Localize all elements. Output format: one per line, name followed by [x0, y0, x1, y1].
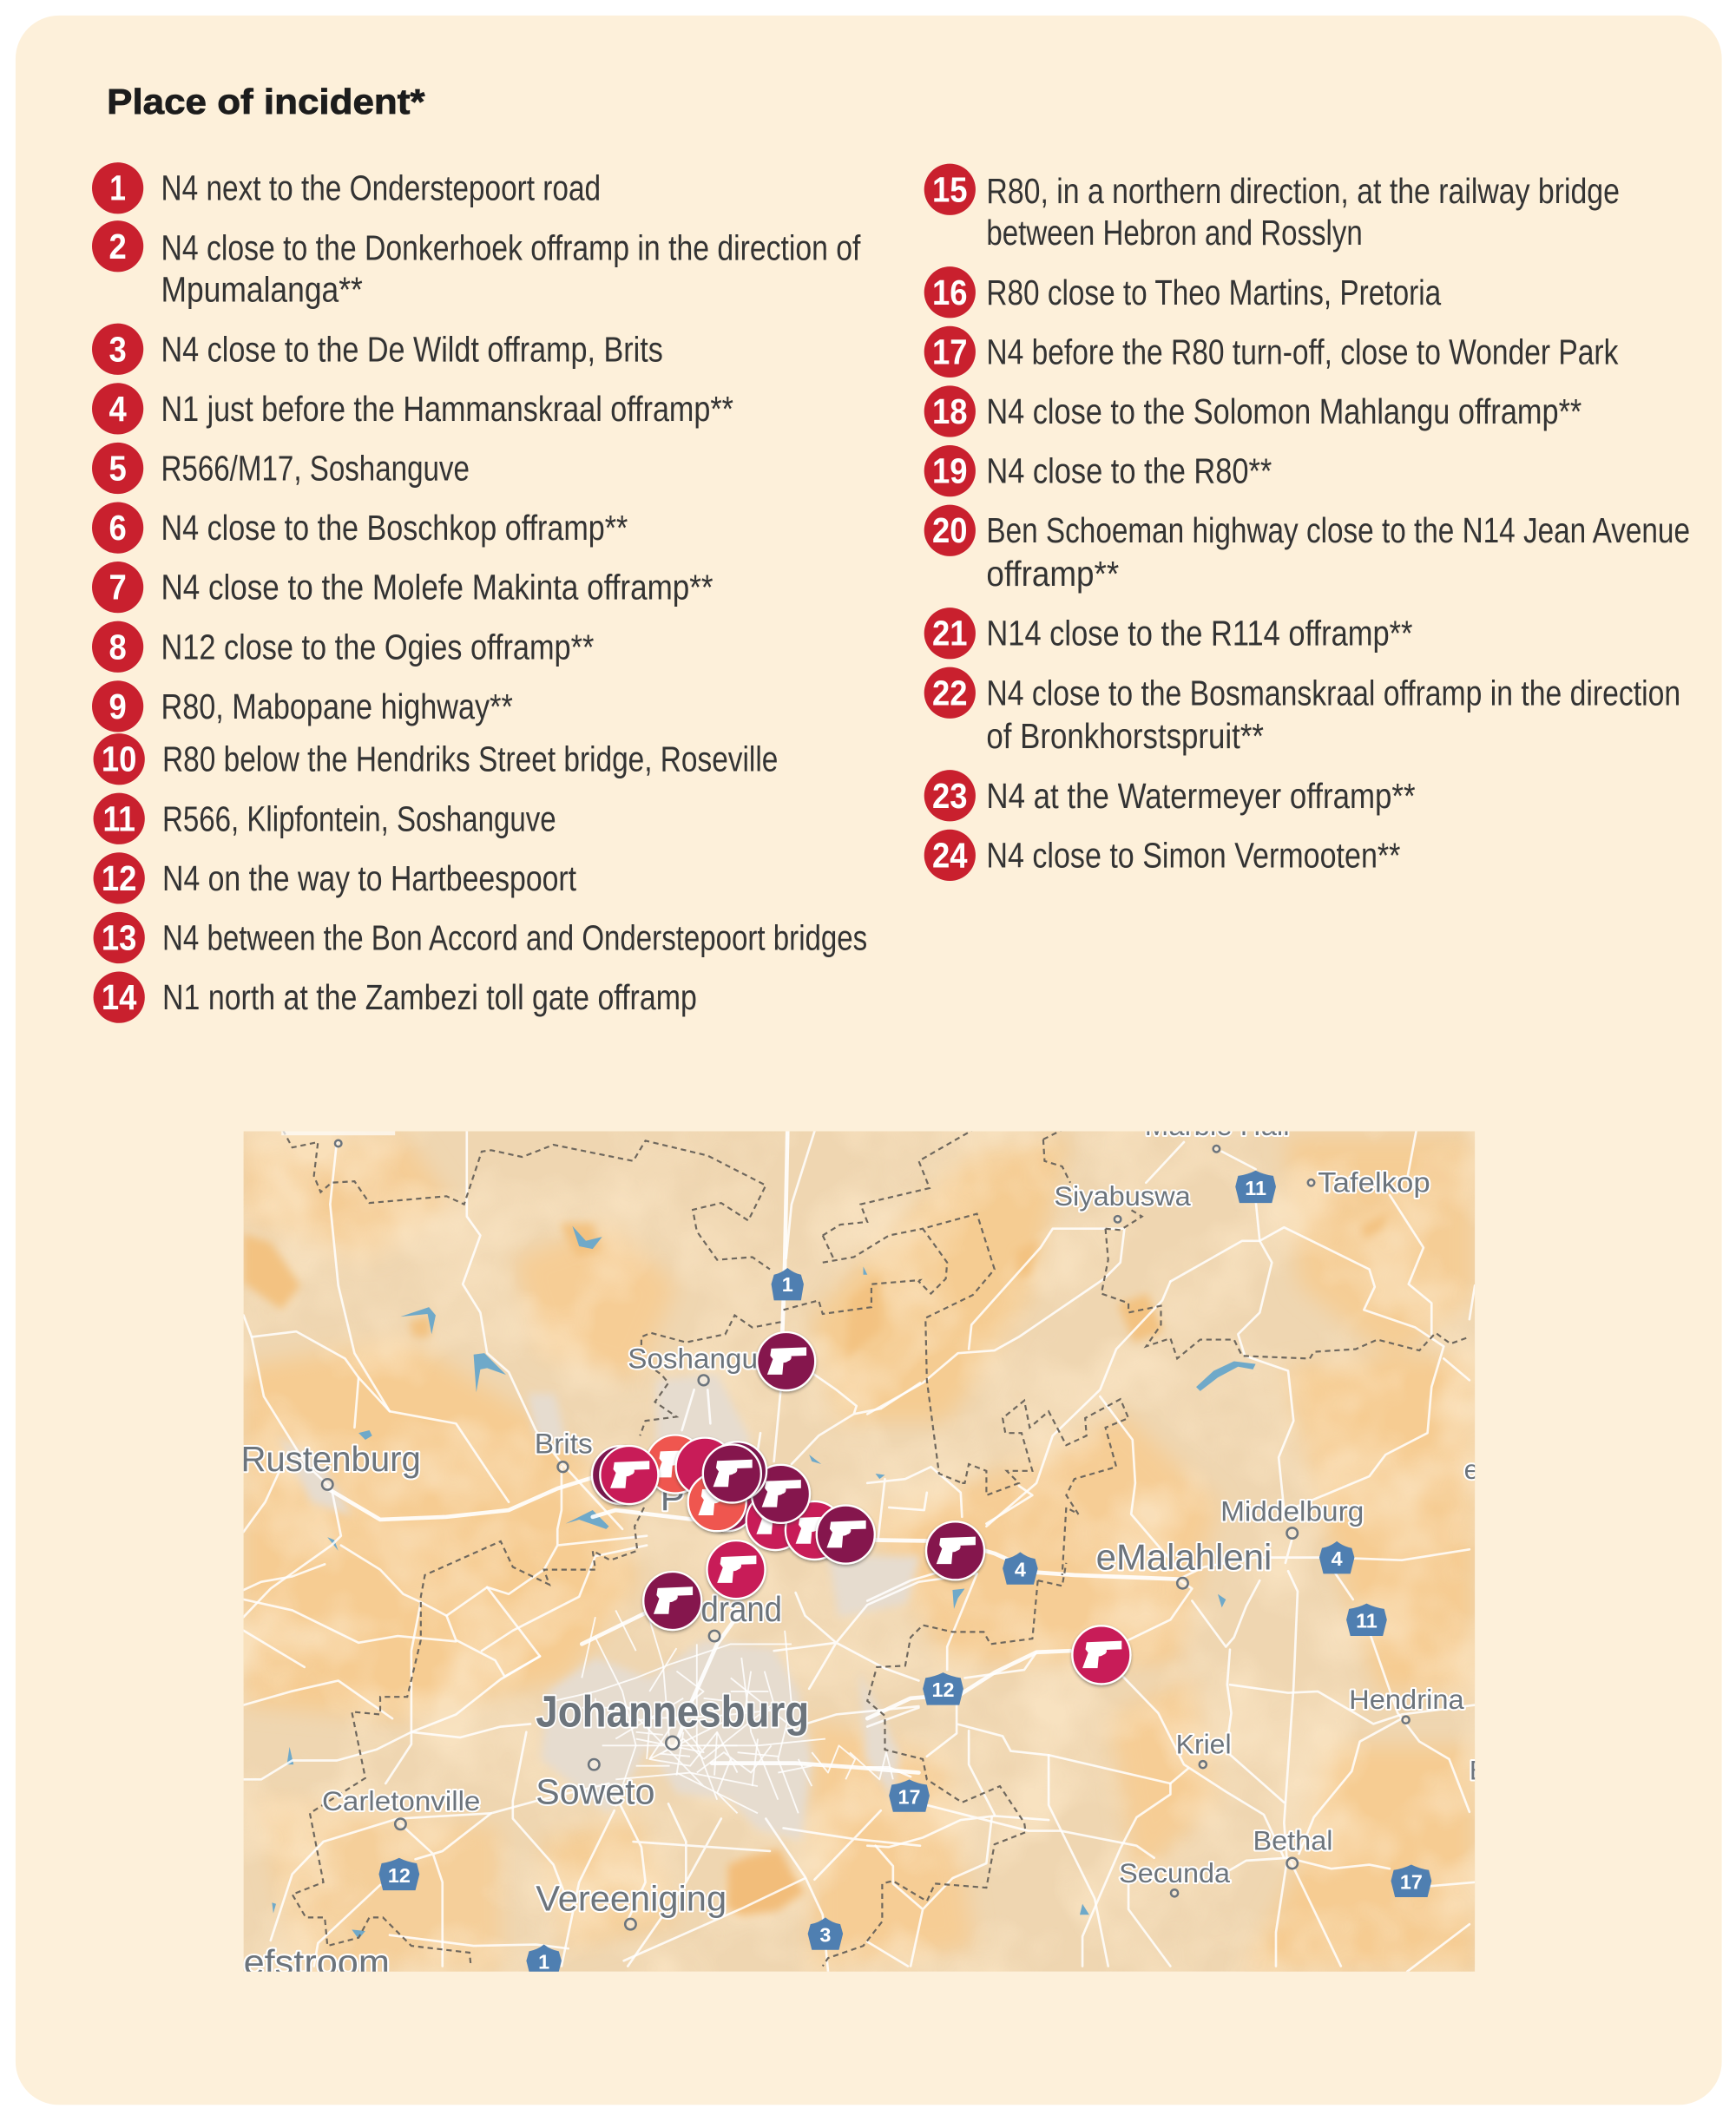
shield N3: [808, 1917, 843, 1950]
label: Soshanguve: Soshangu: [628, 1342, 758, 1374]
item 17: 17: [932, 332, 968, 371]
item 6: N4 close to the Boschkop offramp**: [161, 508, 628, 548]
label: Klerksdorp clipped: efstroom: [244, 1942, 390, 1982]
label: Siyabuswa: Siyabuswa: [1054, 1181, 1191, 1212]
shield N1 north: 1: [782, 1273, 793, 1296]
marker: crimson east 1: [746, 1492, 805, 1550]
item 21: 21: [932, 614, 968, 654]
item 15: R80, in a northern direction, at the railway bridge: [986, 171, 1620, 211]
item 24: 24: [932, 835, 968, 875]
urban grey areas: [278, 1374, 920, 1840]
item 12: 12: [102, 858, 136, 898]
item 23: [924, 770, 1416, 821]
item 10: R80 below the Hendriks Street bridge, Roseville: [162, 739, 778, 779]
item 7: N4 close to the Molefe Makinta offramp**: [161, 568, 713, 608]
item 4: 4: [108, 389, 127, 429]
item 7: [92, 562, 713, 613]
item 24: [924, 830, 1401, 881]
route shields: [378, 1171, 1431, 1977]
label: eMalahleni: eMalahleni: [1096, 1537, 1272, 1578]
item 2: N4 close to the Donkerhoek offramp in the direction of: [161, 227, 861, 267]
marker: crimson behind: [676, 1438, 734, 1496]
item 10: 10: [102, 739, 136, 779]
item 19: 19: [932, 451, 968, 491]
item 15: between Hebron and Rosslyn: [986, 213, 1363, 253]
item 11: [94, 793, 556, 844]
item 22: 22: [932, 673, 968, 713]
label: Marble Hall: Marble Hall: [1145, 1109, 1290, 1142]
label: Soweto: Soweto: [536, 1771, 654, 1811]
shield N4 east: [1319, 1541, 1354, 1573]
item 7: 7: [108, 568, 127, 608]
item 16: [924, 266, 1442, 318]
map terrain patches: [244, 1131, 1475, 1972]
marker: east of Pretoria: [926, 1521, 984, 1580]
label: Brits: Brits: [535, 1428, 593, 1460]
label: Tafelkop: Tafelkop: [1318, 1166, 1430, 1199]
item 2: 2: [108, 227, 127, 266]
item 16: R80 close to Theo Martins, Pretoria: [986, 273, 1442, 312]
item 20: offramp**: [986, 554, 1119, 594]
item 9: 9: [108, 686, 127, 726]
darker orange patches: [244, 1212, 1388, 1358]
marker: coral south: [688, 1473, 746, 1531]
incident markers: [592, 1332, 1130, 1684]
shield N12 west: 12: [388, 1864, 411, 1887]
item 18: 18: [932, 391, 968, 431]
shield N11 east: 11: [1356, 1610, 1378, 1632]
marker: far west dark: [592, 1446, 650, 1504]
item 18: N4 close to the Solomon Mahlangu offramp**: [986, 391, 1581, 431]
label: clipped e: e: [1464, 1455, 1479, 1485]
item 1: N4 next to the Onderstepoort road: [161, 168, 601, 208]
item 17: N4 before the R80 turn-off, close to Wonder Park: [986, 332, 1619, 371]
item 1: 1: [109, 168, 126, 208]
shield N17 centre: [889, 1779, 930, 1812]
label: Carletonville: Carletonville: [322, 1786, 480, 1816]
item 24: N4 close to Simon Vermooten**: [986, 835, 1401, 875]
marker: dark west of Midrand: [643, 1572, 701, 1630]
shield N12 east: [923, 1672, 963, 1705]
roads: [244, 1128, 1475, 1972]
marker: far west crimson: [600, 1446, 658, 1504]
shield N17 east: 17: [1400, 1871, 1423, 1894]
item 23: N4 at the Watermeyer offramp**: [986, 776, 1416, 816]
shield N1 south: [526, 1945, 562, 1977]
marker: dark east: [752, 1465, 810, 1523]
item 23: 23: [932, 776, 968, 816]
item 22: of Bronkhorstspruit**: [986, 716, 1264, 756]
item 5: 5: [108, 449, 127, 489]
item 21: [924, 608, 1413, 659]
item 8: N12 close to the Ogies offramp**: [161, 627, 595, 667]
item 14: [94, 971, 697, 1023]
label: Rustenburg: Rustenburg: [240, 1439, 421, 1479]
clipped label: top left: [281, 1131, 395, 1135]
label: clipped E: E: [1470, 1755, 1488, 1785]
Johannesburg street network: [548, 1610, 893, 1813]
label: Bethal: Bethal: [1253, 1825, 1332, 1856]
item 9: [92, 680, 513, 732]
dark patch near Vereeniging: [727, 1849, 806, 1916]
shield N3: 3: [819, 1923, 831, 1946]
title: Place of incident*: [107, 82, 425, 122]
marker: dark east 2: [817, 1506, 875, 1564]
item 1: [92, 162, 601, 213]
water bodies: [272, 1226, 1256, 1939]
item 11: R566, Klipfontein, Soshanguve: [162, 798, 556, 838]
label: Midrand: drand: [700, 1589, 782, 1629]
label: Kriel: Kriel: [1176, 1730, 1232, 1760]
shield N4 centre: [1003, 1552, 1038, 1585]
item 20: [924, 505, 1690, 594]
list: right column of incidents: [924, 164, 1690, 881]
item 9: R80, Mabopane highway**: [161, 686, 513, 726]
label: Johannesburg: Johannesburg: [536, 1686, 809, 1737]
item 15: 15: [932, 169, 968, 209]
item 6: [92, 502, 628, 554]
label: Middelburg: Middelburg: [1220, 1495, 1364, 1527]
marker: crimson east 2: [786, 1501, 844, 1560]
item 15: [924, 164, 1620, 253]
marker: crimson above Midrand: [707, 1540, 766, 1599]
item 13: [94, 912, 867, 963]
item 4: N1 just before the Hammanskraal offramp**: [161, 389, 733, 429]
item 12: [94, 852, 576, 904]
item 10: [94, 733, 778, 785]
label: Secunda: Secunda: [1119, 1858, 1231, 1888]
shield N12 east: 12: [932, 1678, 955, 1701]
marker: dark centre: [703, 1444, 761, 1502]
shield N1 north: [772, 1268, 804, 1300]
item 14: N1 north at the Zambezi toll gate offramp: [162, 977, 697, 1017]
item 17: [924, 326, 1619, 378]
map of incident locations: [240, 1109, 1488, 1982]
shield N17 centre: 17: [898, 1785, 921, 1808]
shield N12 west: [378, 1858, 419, 1890]
item 13: 13: [102, 918, 136, 958]
item 2: Mpumalanga**: [161, 270, 363, 310]
marker: dark behind: [708, 1442, 766, 1500]
label: Hendrina: Hendrina: [1349, 1685, 1464, 1715]
shield N17 east: [1391, 1865, 1431, 1897]
label: Vereeniging: Vereeniging: [536, 1879, 727, 1919]
item 14: 14: [102, 977, 137, 1017]
item 5: [92, 443, 470, 494]
item 8: [92, 621, 595, 673]
label: Pretoria: P: [661, 1477, 685, 1518]
place names and dots: [240, 1109, 1488, 1982]
item 3: [92, 324, 663, 375]
shield N11 east: [1346, 1604, 1387, 1636]
item 5: R566/M17, Soshanguve: [161, 449, 470, 489]
shield N4 centre: 4: [1015, 1558, 1026, 1580]
item 16: 16: [932, 273, 968, 312]
item 11: 11: [102, 798, 135, 838]
shield N11 north: 11: [1245, 1177, 1266, 1199]
item 4: [92, 383, 733, 434]
item 3: 3: [108, 329, 127, 369]
item 3: N4 close to the De Wildt offramp, Brits: [161, 329, 663, 369]
list: left column of incidents: [92, 162, 867, 1023]
item 20: 20: [932, 510, 968, 550]
shield N11 north: [1235, 1171, 1276, 1203]
shield N4 east: 4: [1332, 1547, 1343, 1570]
item 19: [924, 445, 1272, 496]
shield N1 south: 1: [538, 1951, 549, 1974]
provincial boundaries: [283, 1130, 1470, 1966]
marker: Soshanguve: [757, 1332, 815, 1390]
item 8: 8: [108, 627, 127, 667]
item 22: [924, 667, 1680, 756]
marker: dark under coral: [698, 1473, 756, 1531]
item 12: N4 on the way to Hartbeespoort: [162, 858, 576, 898]
item 2: [92, 220, 861, 310]
item 13: N4 between the Bon Accord and Onderstepoort bridges: [162, 918, 867, 958]
marker: south of eMalahleni: [1072, 1626, 1130, 1684]
item 21: N14 close to the R114 offramp**: [986, 614, 1413, 654]
marker: coral north: [646, 1435, 704, 1494]
item 18: [924, 385, 1581, 437]
item 6: 6: [108, 508, 127, 548]
item 19: N4 close to the R80**: [986, 451, 1272, 491]
